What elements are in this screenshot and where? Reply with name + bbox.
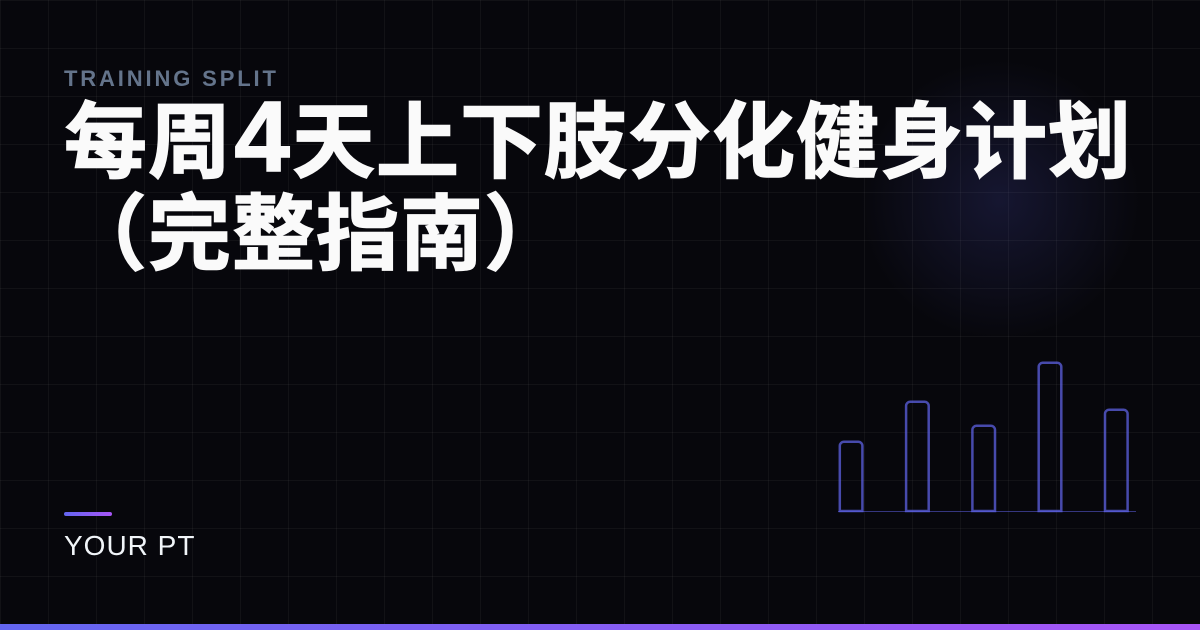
brand name: YOUR PT [64,530,195,561]
eyebrow label: TRAINING SPLIT [64,66,279,91]
glow [860,60,1140,340]
title: 4 [234,81,290,193]
title: 每周 天上下肢分化健身计划（完整指南） [64,96,1132,281]
bottom gradient bar [0,624,1200,630]
accent rule [64,512,112,516]
